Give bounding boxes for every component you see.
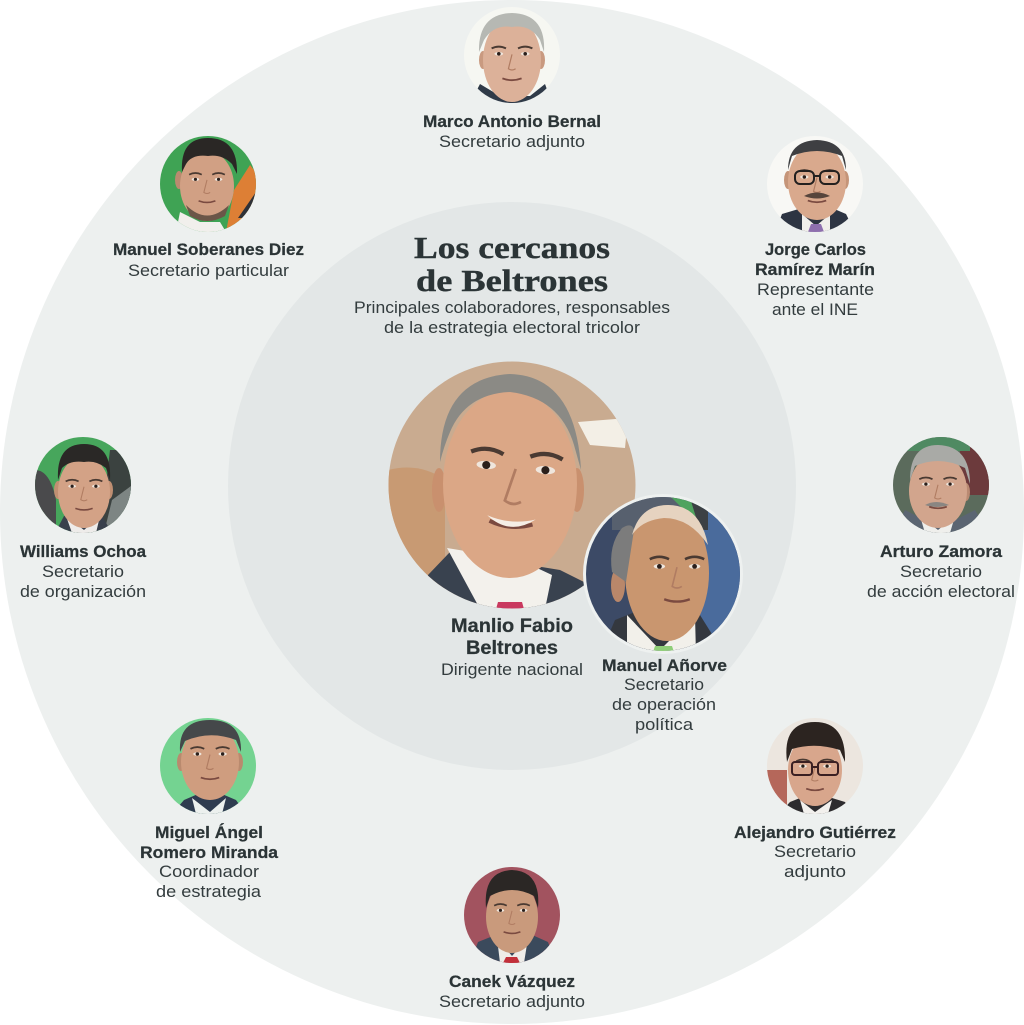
panel: Miguel Ángel Romero Miranda bbox=[140, 718, 279, 901]
role: Secretario adjunto bbox=[439, 133, 585, 151]
portrait: Manuel Añorve bbox=[585, 494, 745, 655]
name: Williams Ochoa bbox=[20, 542, 147, 561]
portrait: Miguel Ángel Romero Miranda bbox=[160, 718, 256, 814]
panel: Arturo Zamora bbox=[867, 437, 1015, 601]
role: Secretario adjunto bbox=[439, 993, 585, 1011]
panel: Manuel Añorve bbox=[583, 494, 745, 734]
name: Jorge Carlos bbox=[765, 240, 866, 259]
portrait: Marco Antonio Bernal bbox=[464, 7, 560, 103]
role: Secretario particular bbox=[128, 262, 290, 280]
portrait: Canek Vázquez bbox=[464, 867, 560, 963]
role: Coordinador bbox=[159, 863, 260, 881]
panel: Alejandro Gutiérrez bbox=[734, 718, 896, 881]
role: Secretario bbox=[900, 563, 982, 581]
role: Secretario bbox=[774, 843, 856, 861]
panel: Jorge Carlos Ramírez Marín bbox=[755, 136, 875, 319]
panel: Manlio Fabio Beltrones bbox=[388, 361, 636, 679]
panel: Canek Vázquez bbox=[439, 867, 585, 1011]
role: Secretario bbox=[624, 676, 704, 694]
subtitle bbox=[354, 299, 670, 337]
ring around portrait bbox=[583, 494, 743, 654]
role: Representante bbox=[757, 281, 874, 299]
role: Secretario bbox=[42, 563, 124, 581]
role line 2: adjunto bbox=[784, 863, 846, 881]
portrait: Alejandro Gutiérrez bbox=[767, 718, 863, 814]
inner circle panel bbox=[228, 202, 796, 770]
name: Canek Vázquez bbox=[449, 972, 575, 991]
panel: Marco Antonio Bernal bbox=[423, 7, 601, 151]
name line 2: Ramírez Marín bbox=[755, 260, 875, 279]
name: Manuel Soberanes Diez bbox=[113, 240, 304, 259]
portrait: Manuel Soberanes Diez bbox=[160, 136, 262, 232]
panel: Williams Ochoa bbox=[20, 437, 147, 601]
title bbox=[414, 230, 610, 298]
name: Manuel Añorve bbox=[602, 656, 727, 675]
subtitle: Principales colaboradores, responsables bbox=[354, 299, 670, 317]
name: Marco Antonio Bernal bbox=[423, 112, 601, 131]
role line 2: de estrategia bbox=[156, 883, 262, 901]
portrait: Williams Ochoa bbox=[35, 437, 131, 533]
title: Los cercanos bbox=[414, 230, 610, 265]
role line 2: de acción electoral bbox=[867, 583, 1015, 601]
name: Miguel Ángel bbox=[155, 823, 263, 842]
subtitle: de la estrategia electoral tricolor bbox=[384, 319, 641, 337]
portrait: Arturo Zamora bbox=[893, 437, 990, 533]
portrait: Jorge Carlos Ramírez Marín bbox=[767, 136, 863, 232]
name: Manlio Fabio bbox=[451, 616, 573, 637]
portrait: Manlio Fabio Beltrones bbox=[388, 361, 636, 609]
title: de Beltrones bbox=[416, 263, 608, 298]
name: Arturo Zamora bbox=[880, 542, 1003, 561]
role line 2: ante el INE bbox=[772, 301, 858, 319]
panel: Manuel Soberanes Diez bbox=[113, 136, 304, 280]
role: Dirigente nacional bbox=[441, 661, 583, 679]
role line 2: de organización bbox=[20, 583, 146, 601]
role line 3: política bbox=[635, 716, 694, 734]
role line 2: de operación bbox=[612, 696, 716, 714]
name line 2: Beltrones bbox=[466, 638, 558, 659]
name line 2: Romero Miranda bbox=[140, 843, 279, 862]
name: Alejandro Gutiérrez bbox=[734, 823, 896, 842]
